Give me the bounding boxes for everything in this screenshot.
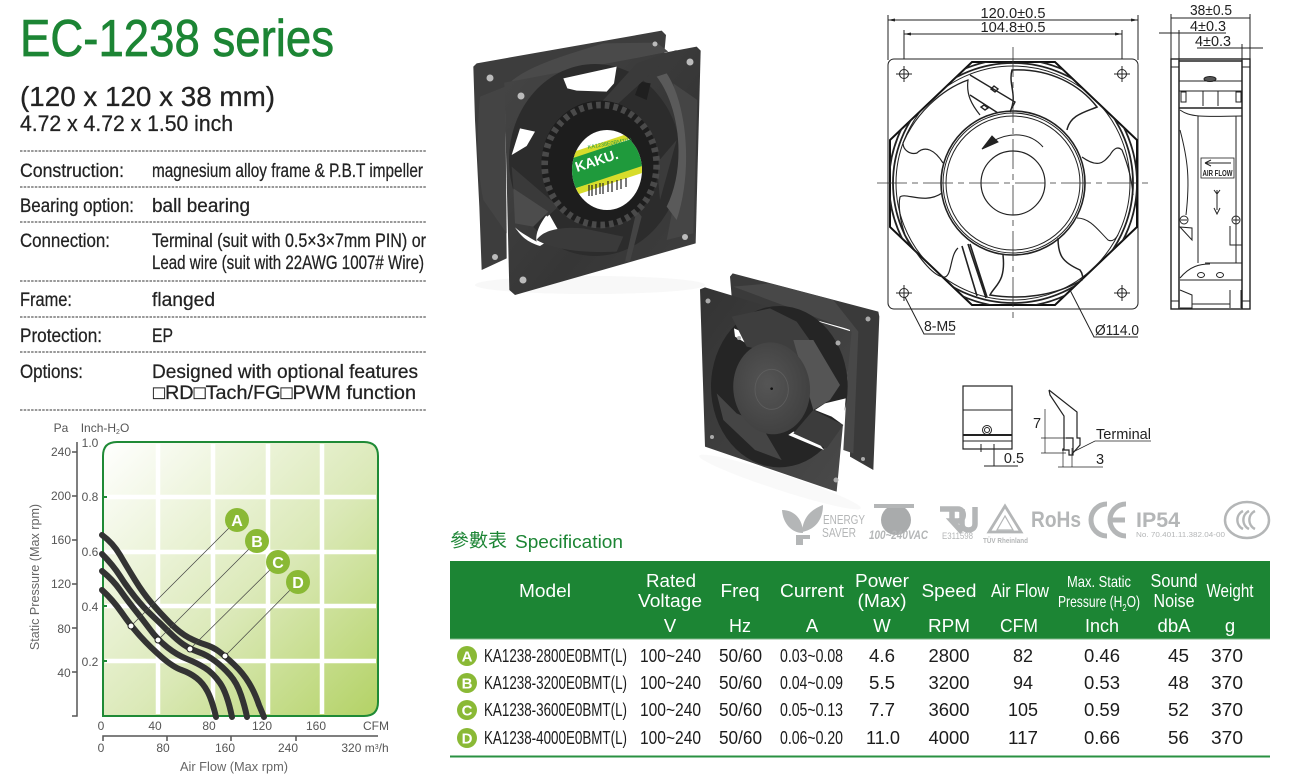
x axis labels: 0 [98, 719, 105, 733]
terminal front [963, 386, 1018, 466]
size in inches: 4.72 x 4.72 x 1.50 inch [20, 111, 233, 136]
table row C: 50/60 [719, 699, 762, 720]
x axis labels: 160 [306, 719, 326, 733]
connection row: Terminal (suit with 0.5×3×7mm PIN) or [152, 231, 427, 252]
y axis labels: Static Pressure (Max rpm) [28, 504, 42, 650]
construction row: magnesium alloy frame & P.B.T impeller [152, 161, 424, 182]
title: EC-1238 series [20, 10, 334, 68]
construction row [20, 161, 424, 182]
dimension: left flange [1159, 19, 1226, 60]
struts [970, 75, 1015, 113]
column: air flow [991, 580, 1050, 636]
column: voltage [638, 570, 702, 636]
table row D: KA1238-4000E0BMT(L) [484, 727, 627, 748]
options row: Designed with optional features [152, 362, 418, 383]
table row C: 52 [1168, 699, 1189, 720]
connection row: Lead wire (suit with 22AWG 1007# Wire) [152, 253, 424, 274]
label sticker: KA1238E0BMT(L) [587, 137, 632, 151]
leader lines and points [128, 520, 298, 659]
column: speed: Speed [922, 580, 976, 601]
column: power: Power [855, 570, 909, 591]
motor hub [729, 339, 815, 438]
chart: static pressure vs air flow [28, 421, 389, 774]
options row: □RD□Tach/FG□PWM function [153, 383, 416, 404]
table row B [457, 672, 1243, 693]
air flow marking [1201, 158, 1234, 214]
table row A: 82 [1013, 645, 1033, 666]
air flow marking: AIR FLOW [1202, 169, 1233, 178]
curve badges: D [292, 575, 304, 592]
column: current: A [806, 615, 819, 636]
table row C [457, 699, 1243, 720]
curve badges: A [231, 513, 243, 530]
table row A [457, 645, 1243, 666]
curve badges: B [251, 534, 263, 551]
table row C: 3600 [928, 699, 970, 720]
table row B: 0.53 [1084, 672, 1120, 693]
table row A: 45 [1168, 645, 1189, 666]
product photo: fan front with label [473, 31, 705, 295]
size in millimetres: (120 x 120 x 38 mm) [20, 81, 275, 112]
x axis labels: 320 m [341, 741, 375, 755]
table row D: 56 [1168, 727, 1189, 748]
table row D: 117 [1008, 727, 1038, 748]
drawing: front view [877, 6, 1150, 339]
table row A: A [462, 648, 473, 666]
section heading: specification: 參數表 [450, 527, 507, 553]
column: current [780, 580, 844, 636]
geared hub [541, 101, 659, 227]
table row B: 100~240 [640, 672, 701, 693]
y axis labels: 0.4 [82, 600, 99, 614]
table row D: 4000 [928, 727, 970, 748]
column: sound noise: Noise [1154, 590, 1194, 611]
column: model: Model [519, 580, 571, 601]
column: weight: Weight [1206, 580, 1254, 601]
side outline [1171, 59, 1250, 309]
mounting holes [896, 66, 1130, 301]
frame outline [888, 59, 1138, 309]
logo: CCC [1225, 502, 1269, 538]
openings [563, 67, 617, 92]
drawing: terminal detail [963, 386, 1151, 468]
table row B: KA1238-3200E0BMT(L) [484, 672, 627, 693]
column: sound noise: Sound [1150, 570, 1198, 591]
column: static pressure [1058, 574, 1140, 636]
label sticker [570, 128, 645, 210]
bearing row [20, 196, 250, 217]
dimension: pin height: 7 [1033, 416, 1041, 432]
protection row: Protection: [20, 326, 102, 347]
product photo: fan rear [697, 273, 879, 516]
callout: impeller diameter: Ø114.0 [1095, 323, 1139, 339]
logo: UR [940, 507, 975, 541]
dimension: depth: 38±0.5 [1190, 3, 1232, 19]
logo: voltage range [869, 504, 929, 542]
y axis labels: Inch-H [81, 421, 116, 435]
logo: energy saver [782, 505, 866, 545]
x axis labels: 160 [215, 741, 235, 755]
table row A: 100~240 [640, 645, 701, 666]
certification logos [782, 502, 1269, 545]
table row B: 94 [1013, 672, 1033, 693]
dimension: depth [1171, 3, 1250, 60]
table row D [457, 727, 1243, 748]
table row C: 0.05~0.13 [780, 699, 843, 720]
bearing row: ball bearing [152, 196, 250, 217]
column: static pressure: Max. Static [1067, 574, 1131, 591]
x axis labels: 120 [252, 719, 272, 733]
y axis labels: 0.8 [82, 490, 99, 504]
curve badges [225, 508, 310, 594]
table row A: 0.03~0.08 [780, 645, 843, 666]
table row C: 0.59 [1084, 699, 1120, 720]
column: static pressure: Inch [1085, 615, 1119, 636]
column: power: (Max) [858, 590, 906, 611]
y axis labels: Pa [54, 421, 69, 435]
callout: screw size: 8-M5 [924, 319, 956, 335]
y axis labels: 0.6 [82, 545, 99, 559]
terminal label: Terminal [1096, 427, 1151, 443]
table row B: 3200 [928, 672, 970, 693]
section heading: specification [450, 527, 623, 553]
table row D: 0.66 [1084, 727, 1120, 748]
logo: UR: E311598 [942, 531, 973, 541]
dimension: pin thickness: 0.5 [1004, 451, 1024, 467]
column: power: W [873, 615, 891, 636]
panel: specification list [20, 151, 427, 410]
table row A: 370 [1211, 645, 1243, 666]
table row B: 0.04~0.09 [780, 672, 843, 693]
table row C: 105 [1008, 699, 1038, 720]
column: current: Current [780, 580, 844, 601]
y axis labels: 0.2 [82, 655, 99, 669]
curve badges: C [272, 555, 284, 572]
logo: TUV: TÜV Rheinland [983, 536, 1028, 545]
x axis labels: /h [379, 741, 389, 755]
inner rings [889, 59, 1137, 307]
y axis labels: 200 [51, 489, 71, 503]
y axis labels: 160 [51, 533, 71, 547]
construction row: Construction: [20, 161, 124, 182]
table bottom rule [450, 756, 1270, 758]
table row A: 50/60 [719, 645, 762, 666]
y axis labels: 80 [57, 622, 71, 636]
table row C: KA1238-3600E0BMT(L) [484, 699, 627, 720]
table row B: 5.5 [869, 672, 895, 693]
logo: IP54: IP54 [1136, 509, 1180, 532]
callout: impeller diameter [1070, 290, 1139, 339]
column: frequency: Freq [720, 580, 760, 601]
table row B: 50/60 [719, 672, 762, 693]
rotation arrow [993, 135, 1043, 147]
table row A: KA1238-2800E0BMT(L) [484, 645, 627, 666]
logo: IP54 [1136, 509, 1225, 539]
x axis labels: 40 [148, 719, 162, 733]
section heading: specification: Specification [515, 531, 623, 552]
table row C: C [462, 702, 473, 720]
protection row: EP [152, 326, 173, 347]
logo: energy saver: SAVER [822, 526, 856, 540]
column: speed: RPM [928, 615, 970, 636]
drawing: side view [1159, 3, 1263, 309]
table row D: 0.06~0.20 [780, 727, 843, 748]
logo: TUV [983, 506, 1028, 545]
table row B: B [462, 676, 473, 692]
frame row [20, 290, 215, 311]
blades [899, 70, 1133, 298]
column: frequency: Hz [729, 615, 751, 636]
x axis labels [98, 719, 389, 774]
table row A: 4.6 [869, 645, 895, 666]
x axis labels: 3 [375, 744, 379, 751]
column: speed [922, 580, 976, 636]
plot background [103, 442, 378, 716]
column: static pressure: O) [1127, 594, 1140, 611]
table row D: 100~240 [640, 727, 701, 748]
logo: energy saver: ENERGY [823, 513, 866, 527]
x axis labels: Air Flow (Max rpm) [180, 759, 288, 774]
table row D: 50/60 [719, 727, 762, 748]
openings [734, 328, 745, 343]
blades and struts [587, 50, 677, 117]
table row A: 0.46 [1084, 645, 1120, 666]
dimension: left flange: 4±0.3 [1190, 19, 1226, 35]
table header [450, 561, 1270, 639]
label sticker: KAKU. [573, 146, 620, 175]
fan curves [102, 535, 264, 717]
column: sound noise: dbA [1158, 615, 1191, 636]
table row A: 2800 [928, 645, 970, 666]
dimension: overall width: 120.0±0.5 [980, 6, 1046, 22]
logo: CE [1091, 504, 1126, 536]
column: sound noise [1150, 570, 1198, 636]
column: weight: g [1225, 615, 1235, 636]
x axis labels: 80 [202, 719, 216, 733]
options row: Options: [20, 362, 83, 383]
impeller blades [732, 308, 817, 357]
table row C: 7.7 [869, 699, 895, 720]
table row B: 370 [1211, 672, 1243, 693]
logo: IP54: No. 70.401.11.382.04-00 [1136, 530, 1225, 539]
dimension: right flange [1195, 34, 1263, 60]
x axis labels: CFM [363, 719, 389, 733]
column: weight [1206, 580, 1254, 636]
table row D: 11.0 [866, 727, 900, 748]
frame row: flanged [152, 290, 215, 311]
y axis labels [28, 421, 129, 680]
column: power [855, 570, 909, 636]
column: air flow: CFM [1000, 615, 1038, 636]
options row [20, 362, 418, 404]
dimension: hole spacing: 104.8±0.5 [980, 20, 1046, 36]
dimension: right flange: 4±0.3 [1195, 34, 1231, 50]
y axis labels: 240 [51, 445, 71, 459]
y axis labels: 1.0 [82, 436, 99, 450]
connection row: Connection: [20, 231, 110, 252]
y axis labels: 120 [51, 577, 71, 591]
column: frequency [720, 580, 760, 636]
y axis labels: 40 [57, 666, 71, 680]
x axis labels: 0 [98, 741, 105, 755]
table row D: D [462, 730, 473, 748]
table row B: 48 [1168, 672, 1189, 693]
table row D: 370 [1211, 727, 1243, 748]
x axis labels: 80 [156, 741, 170, 755]
column: voltage: Rated [646, 570, 696, 591]
logo: RoHS: RoHs [1031, 507, 1081, 532]
dimension: overall width [888, 6, 1138, 60]
frame row: Frame: [20, 290, 72, 311]
dimension: pin width: 3 [1096, 452, 1104, 468]
callout: screw size [905, 297, 956, 335]
column: voltage: V [664, 615, 677, 636]
centre lines [877, 47, 1150, 320]
table row C: 370 [1211, 699, 1243, 720]
protection row [20, 326, 173, 347]
column: voltage: Voltage [638, 590, 702, 611]
y axis labels: O [120, 421, 129, 435]
logo: voltage range: 100~240VAC [869, 530, 929, 542]
column: static pressure: Pressure (H [1058, 594, 1143, 611]
x axis labels: 240 [278, 741, 298, 755]
connection row [20, 231, 427, 274]
table row C: 100~240 [640, 699, 701, 720]
axes [72, 442, 378, 741]
column: static pressure: 2 [1122, 603, 1127, 614]
y axis labels: 2 [116, 429, 120, 436]
bearing row: Bearing option: [20, 196, 134, 217]
column: air flow: Air Flow [991, 580, 1050, 601]
terminal side [1041, 390, 1151, 467]
dimension: hole spacing [904, 20, 1122, 80]
